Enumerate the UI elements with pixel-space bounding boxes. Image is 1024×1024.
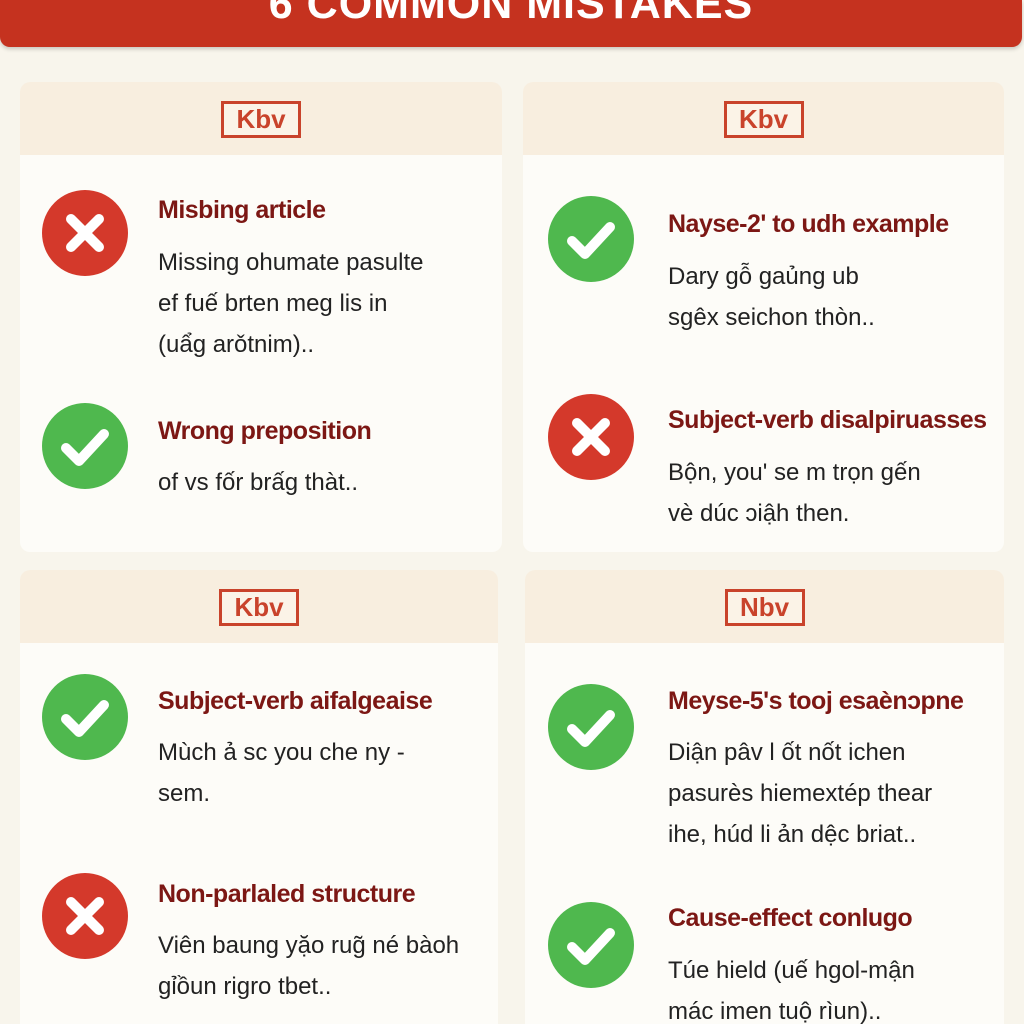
heading: Wrong preposition [158,417,371,445]
tag [724,589,804,626]
heading: Misbing article [158,196,326,224]
icon: check [548,196,634,282]
text: ihe, húd li ản dệc briat.. [668,821,916,848]
text: of vs fốr brấg thàt.. [158,469,358,496]
icon: check [42,403,128,489]
icon: cross [42,873,128,959]
text [668,262,875,331]
icon: check [548,902,634,988]
heading: Meyse-5's tooj esaènɔpne [668,687,963,715]
panel: top-right [523,82,1004,552]
text: (uẩg arǒtnim).. [158,331,314,358]
text [668,957,915,1024]
tag [221,101,301,138]
heading: Subject-verb disalpiruasses [668,406,987,434]
text: ef fuế brten meg lis in [158,290,387,317]
tag: Kbv [236,104,286,134]
tag: Kbv [739,104,788,134]
text: Bộn, you' se m trọn gến [668,459,921,486]
text: pasurès hiemextép thear [668,780,932,807]
text: Viên baung yặo rug̃ né bàoh [158,932,459,959]
text: Missing ohumate pasulte [158,249,423,276]
tag: Nbv [740,592,789,622]
text: sgêx seichon thòn.. [668,304,875,331]
text: Mùch ả sc you che ny - [158,739,405,766]
icon: cross [548,394,634,480]
tag: Kbv [234,592,284,622]
text [668,459,921,527]
text [158,249,423,358]
text: vè dúc ɔiậh then. [668,500,849,527]
panel: bottom-right [525,570,1004,1024]
panel: top-left [20,82,502,552]
heading: Non-parlaled structure [158,880,415,908]
text [668,739,932,848]
text [158,739,405,807]
text: Túe hield (uế hgol-mận [668,957,915,984]
text [158,932,459,1000]
icon: cross [42,190,128,276]
text: Dary gỗ gaủng ub [668,263,859,290]
text: gỉồun rigro tbet.. [158,973,331,1000]
icon: check [42,674,128,760]
panel: bottom-left [20,570,498,1024]
tag [219,589,299,626]
icon: check [548,684,634,770]
text: sem. [158,780,210,807]
tag [724,101,804,138]
heading: Nayse-2' to udh example [668,210,949,238]
heading: Subject-verb aifalgeaise [158,687,432,715]
title bar [0,0,1022,47]
text: Diận pâv l ốt nốt ichen [668,739,905,766]
heading: Cause-effect conlugo [668,904,912,932]
